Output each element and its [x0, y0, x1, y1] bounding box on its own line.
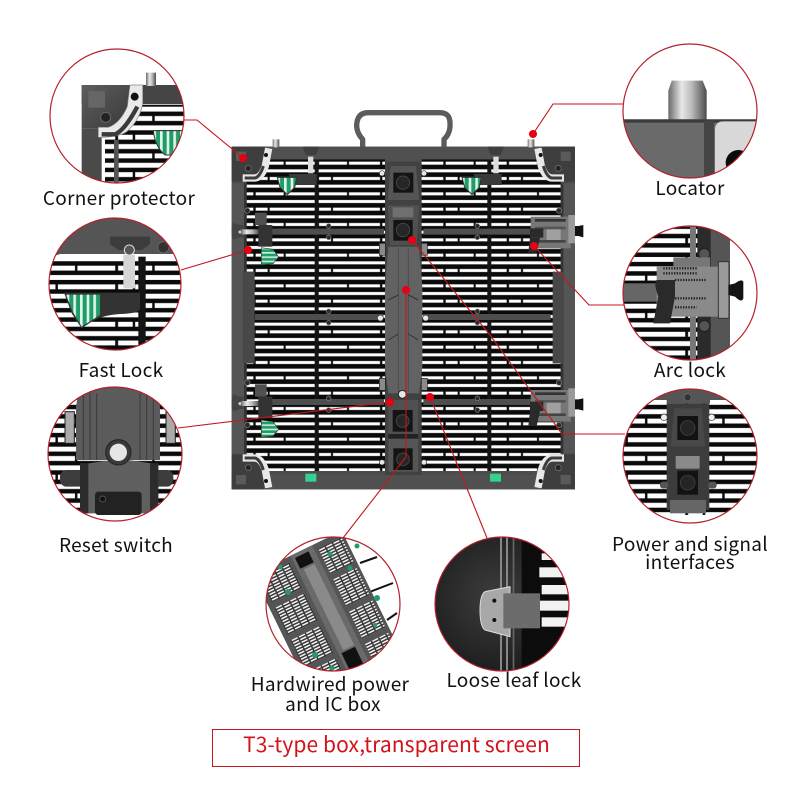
detail circle: fast lock: [48, 217, 182, 353]
signal connector: [388, 205, 419, 245]
label: hardwired power and IC box: Hardwired power: [251, 670, 409, 697]
label: corner protector: Corner protector: [43, 184, 195, 211]
bottom green tabs: [305, 474, 501, 482]
top power connector: [388, 166, 419, 200]
label: fast lock: Fast Lock: [79, 356, 164, 383]
label: locator: Locator: [655, 174, 725, 201]
white bolts: [377, 171, 429, 465]
top rail: [232, 147, 575, 162]
center bar: [385, 247, 422, 393]
reset button: [398, 390, 406, 398]
frame body: [232, 147, 575, 489]
side rail gaps: [245, 183, 562, 453]
label: hardwired power and IC box: and IC box: [285, 690, 381, 717]
label: loose leaf lock: Loose leaf lock: [446, 666, 582, 693]
module dividers: [317, 159, 489, 471]
caption box: T3-type box,transparent screen: [243, 729, 550, 759]
handle: [357, 113, 450, 150]
main panel: LED cabinet rear view: [232, 113, 583, 489]
top fast lock arms: [288, 147, 504, 185]
left fast locks: [232, 213, 279, 437]
detail circle: arc lock: [623, 226, 757, 360]
detail circle: hardwired power and IC box: [265, 536, 401, 672]
leader lines: [178, 104, 625, 538]
right arc locks: [528, 215, 583, 426]
horizontal bars: [255, 229, 551, 405]
label: reset switch: Reset switch: [59, 531, 173, 558]
label: power and signal interfaces: interfaces: [645, 548, 735, 575]
top green handles: [277, 177, 481, 195]
label: power and signal interfaces: Power and signal: [612, 530, 768, 557]
bottom rail: [232, 475, 575, 489]
small latches: [379, 243, 427, 390]
detail circle: reset switch: [48, 387, 183, 521]
detail circle: loose leaf lock: [435, 537, 572, 673]
vertical side braces: [243, 272, 564, 363]
detail circle: locator: [623, 44, 757, 180]
detail circle: power and signal interfaces: [623, 388, 757, 523]
side rails: [232, 183, 575, 453]
lower connectors: [388, 400, 418, 472]
label: arc lock: Arc lock: [654, 356, 726, 383]
locator studs: [273, 139, 534, 147]
callout dots: [239, 130, 538, 406]
corner protectors: [232, 147, 575, 489]
top rail details: [245, 149, 562, 487]
slat grid: [247, 159, 561, 471]
caption box: [212, 729, 580, 766]
detail circle: corner protector: [50, 49, 185, 185]
central spine: [385, 160, 422, 475]
